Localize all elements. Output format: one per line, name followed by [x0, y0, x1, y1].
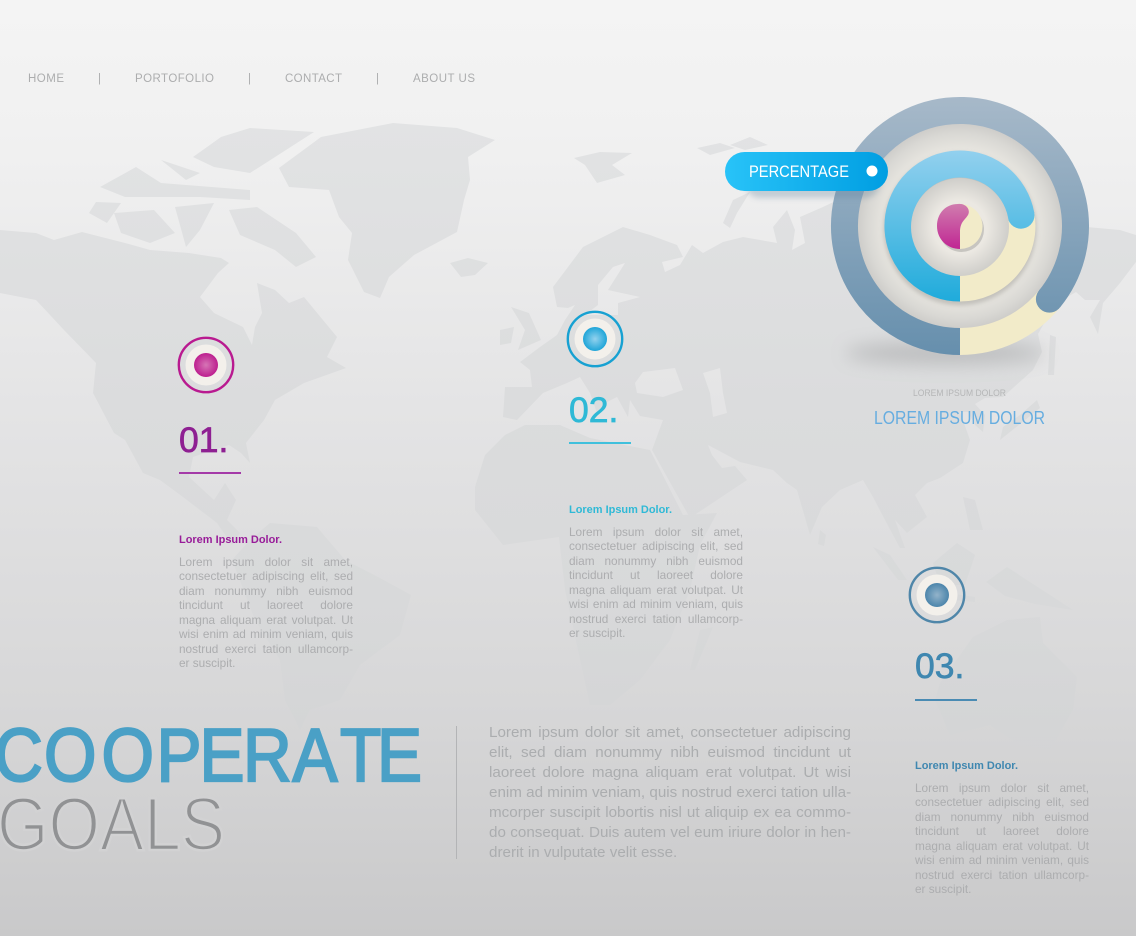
map: iceland and british isles — [450, 258, 541, 350]
intro paragraph: Lorem ipsum dolor sit amet, consectetuer adipiscing — [489, 724, 851, 741]
body text 02: er suscipit. — [569, 626, 625, 640]
heading 03: Lorem Ipsum Dolor. — [915, 760, 1018, 772]
heading 01: Lorem Ipsum Dolor. — [179, 534, 282, 546]
map: north america — [0, 230, 346, 545]
marker 01 — [179, 338, 233, 392]
body text 01: magna aliquam erat volutpat. Ut — [179, 613, 353, 627]
body text 03: consectetuer adipiscing elit, sed — [915, 795, 1089, 809]
navigation bar: | — [248, 73, 251, 85]
body text 03: wisi enim ad minim veniam, quis — [915, 853, 1089, 867]
chart hub — [911, 178, 1009, 276]
number 03 underline — [915, 699, 977, 701]
navigation bar: ABOUT US — [413, 73, 475, 85]
intro paragraph: drerit in vulputate velit esse. — [489, 844, 677, 861]
percentage pill shadow — [745, 168, 880, 198]
outer ring cream track — [960, 299, 1049, 342]
title divider — [456, 726, 457, 859]
outer ring value arc — [844, 110, 1075, 342]
body text 03 — [915, 781, 1089, 896]
title: cooperate: COOPERATE — [0, 714, 422, 798]
body text 02: magna aliquam erat volutpat. Ut — [569, 583, 743, 597]
body text 02 — [569, 525, 743, 640]
navigation bar: | — [376, 73, 379, 85]
inner ring shadow — [884, 152, 1036, 306]
map: australia — [935, 617, 1077, 750]
navigation bar: PORTOFOLIO — [135, 73, 214, 85]
body text 02: nostrud exerci tation ullamcorp- — [569, 612, 743, 626]
chart caption large: LOREM IPSUM DOLOR — [874, 408, 1045, 428]
intro paragraph: do consequat. Duis autem vel eum iriure dolor in hen- — [489, 824, 851, 841]
body text 03: nostrud exerci tation ullamcorp- — [915, 868, 1089, 882]
body text 01: consectetuer adipiscing elit, sed — [179, 569, 353, 583]
map: south america — [232, 523, 411, 730]
navigation bar: CONTACT — [285, 73, 342, 85]
body text 02: Lorem ipsum dolor sit amet, — [569, 525, 743, 539]
body text 02: tincidunt ut laoreet dolore — [569, 568, 743, 582]
body text 02: consectetuer adipiscing elit, sed — [569, 539, 743, 553]
intro paragraph: elit, sed diam nonummy nibh euismod tincidunt ut — [489, 744, 851, 761]
body text 03: diam nonummy nibh euismod — [915, 810, 1089, 824]
body text 01: diam nonummy nibh euismod — [179, 584, 353, 598]
navigation bar: HOME — [28, 73, 64, 85]
body text 01: wisi enim ad minim veniam, quis — [179, 627, 353, 641]
hub magenta value — [937, 204, 969, 249]
intro paragraph: enim ad minim veniam, quis nostrud exerci tation ulla- — [489, 784, 851, 801]
navigation bar: | — [98, 73, 101, 85]
body text 02: wisi enim ad minim veniam, quis — [569, 597, 743, 611]
percentage pill — [725, 152, 888, 191]
body text 02: diam nonummy nibh euismod — [569, 554, 743, 568]
map: asian islands — [690, 335, 1073, 670]
world map — [0, 123, 1136, 750]
body text 01: tincidunt ut laoreet dolore — [179, 598, 353, 612]
navigation bar — [28, 73, 475, 85]
body text 01 — [179, 555, 353, 670]
body text 01: Lorem ipsum dolor sit amet, — [179, 555, 353, 569]
percentage pill: PERCENTAGE — [749, 163, 849, 181]
marker 02 — [568, 312, 622, 366]
title: goals: GOALS — [0, 782, 225, 866]
intro paragraph: mcorper suscipit lobortis nisl ut aliquip ex ea commo- — [489, 804, 851, 821]
chart base disc — [857, 123, 1063, 329]
body text 01: nostrud exerci tation ullamcorp- — [179, 642, 353, 656]
intro paragraph — [489, 724, 851, 861]
heading 02: Lorem Ipsum Dolor. — [569, 504, 672, 516]
hub cream disc — [938, 204, 982, 249]
radial percentage chart — [844, 110, 1075, 342]
body text 03: Lorem ipsum dolor sit amet, — [915, 781, 1089, 795]
chart shadow — [845, 342, 1045, 364]
map: eurasia — [503, 170, 1136, 548]
intro paragraph: laoreet dolore magna aliquam erat volutpat. Ut wisi — [489, 764, 851, 781]
number 02: 02. — [569, 390, 618, 430]
number 01 underline — [179, 472, 241, 474]
body text 03: magna aliquam erat volutpat. Ut — [915, 839, 1089, 853]
number 02 underline — [569, 442, 631, 444]
map: africa — [475, 425, 717, 705]
map: arctic islands — [89, 128, 768, 267]
number 03: 03. — [915, 646, 964, 686]
body text 03: tincidunt ut laoreet dolore — [915, 824, 1089, 838]
inner ring value arc — [898, 164, 1034, 288]
body text 03: er suscipit. — [915, 882, 971, 896]
number 01: 01. — [179, 420, 228, 460]
inner ring cream track — [960, 215, 1022, 288]
body text 01: er suscipit. — [179, 656, 235, 670]
chart caption small: LOREM IPSUM DOLOR — [913, 388, 1006, 398]
map: greenland — [279, 123, 495, 298]
marker 03 — [910, 568, 964, 622]
hub shadow — [939, 207, 984, 252]
